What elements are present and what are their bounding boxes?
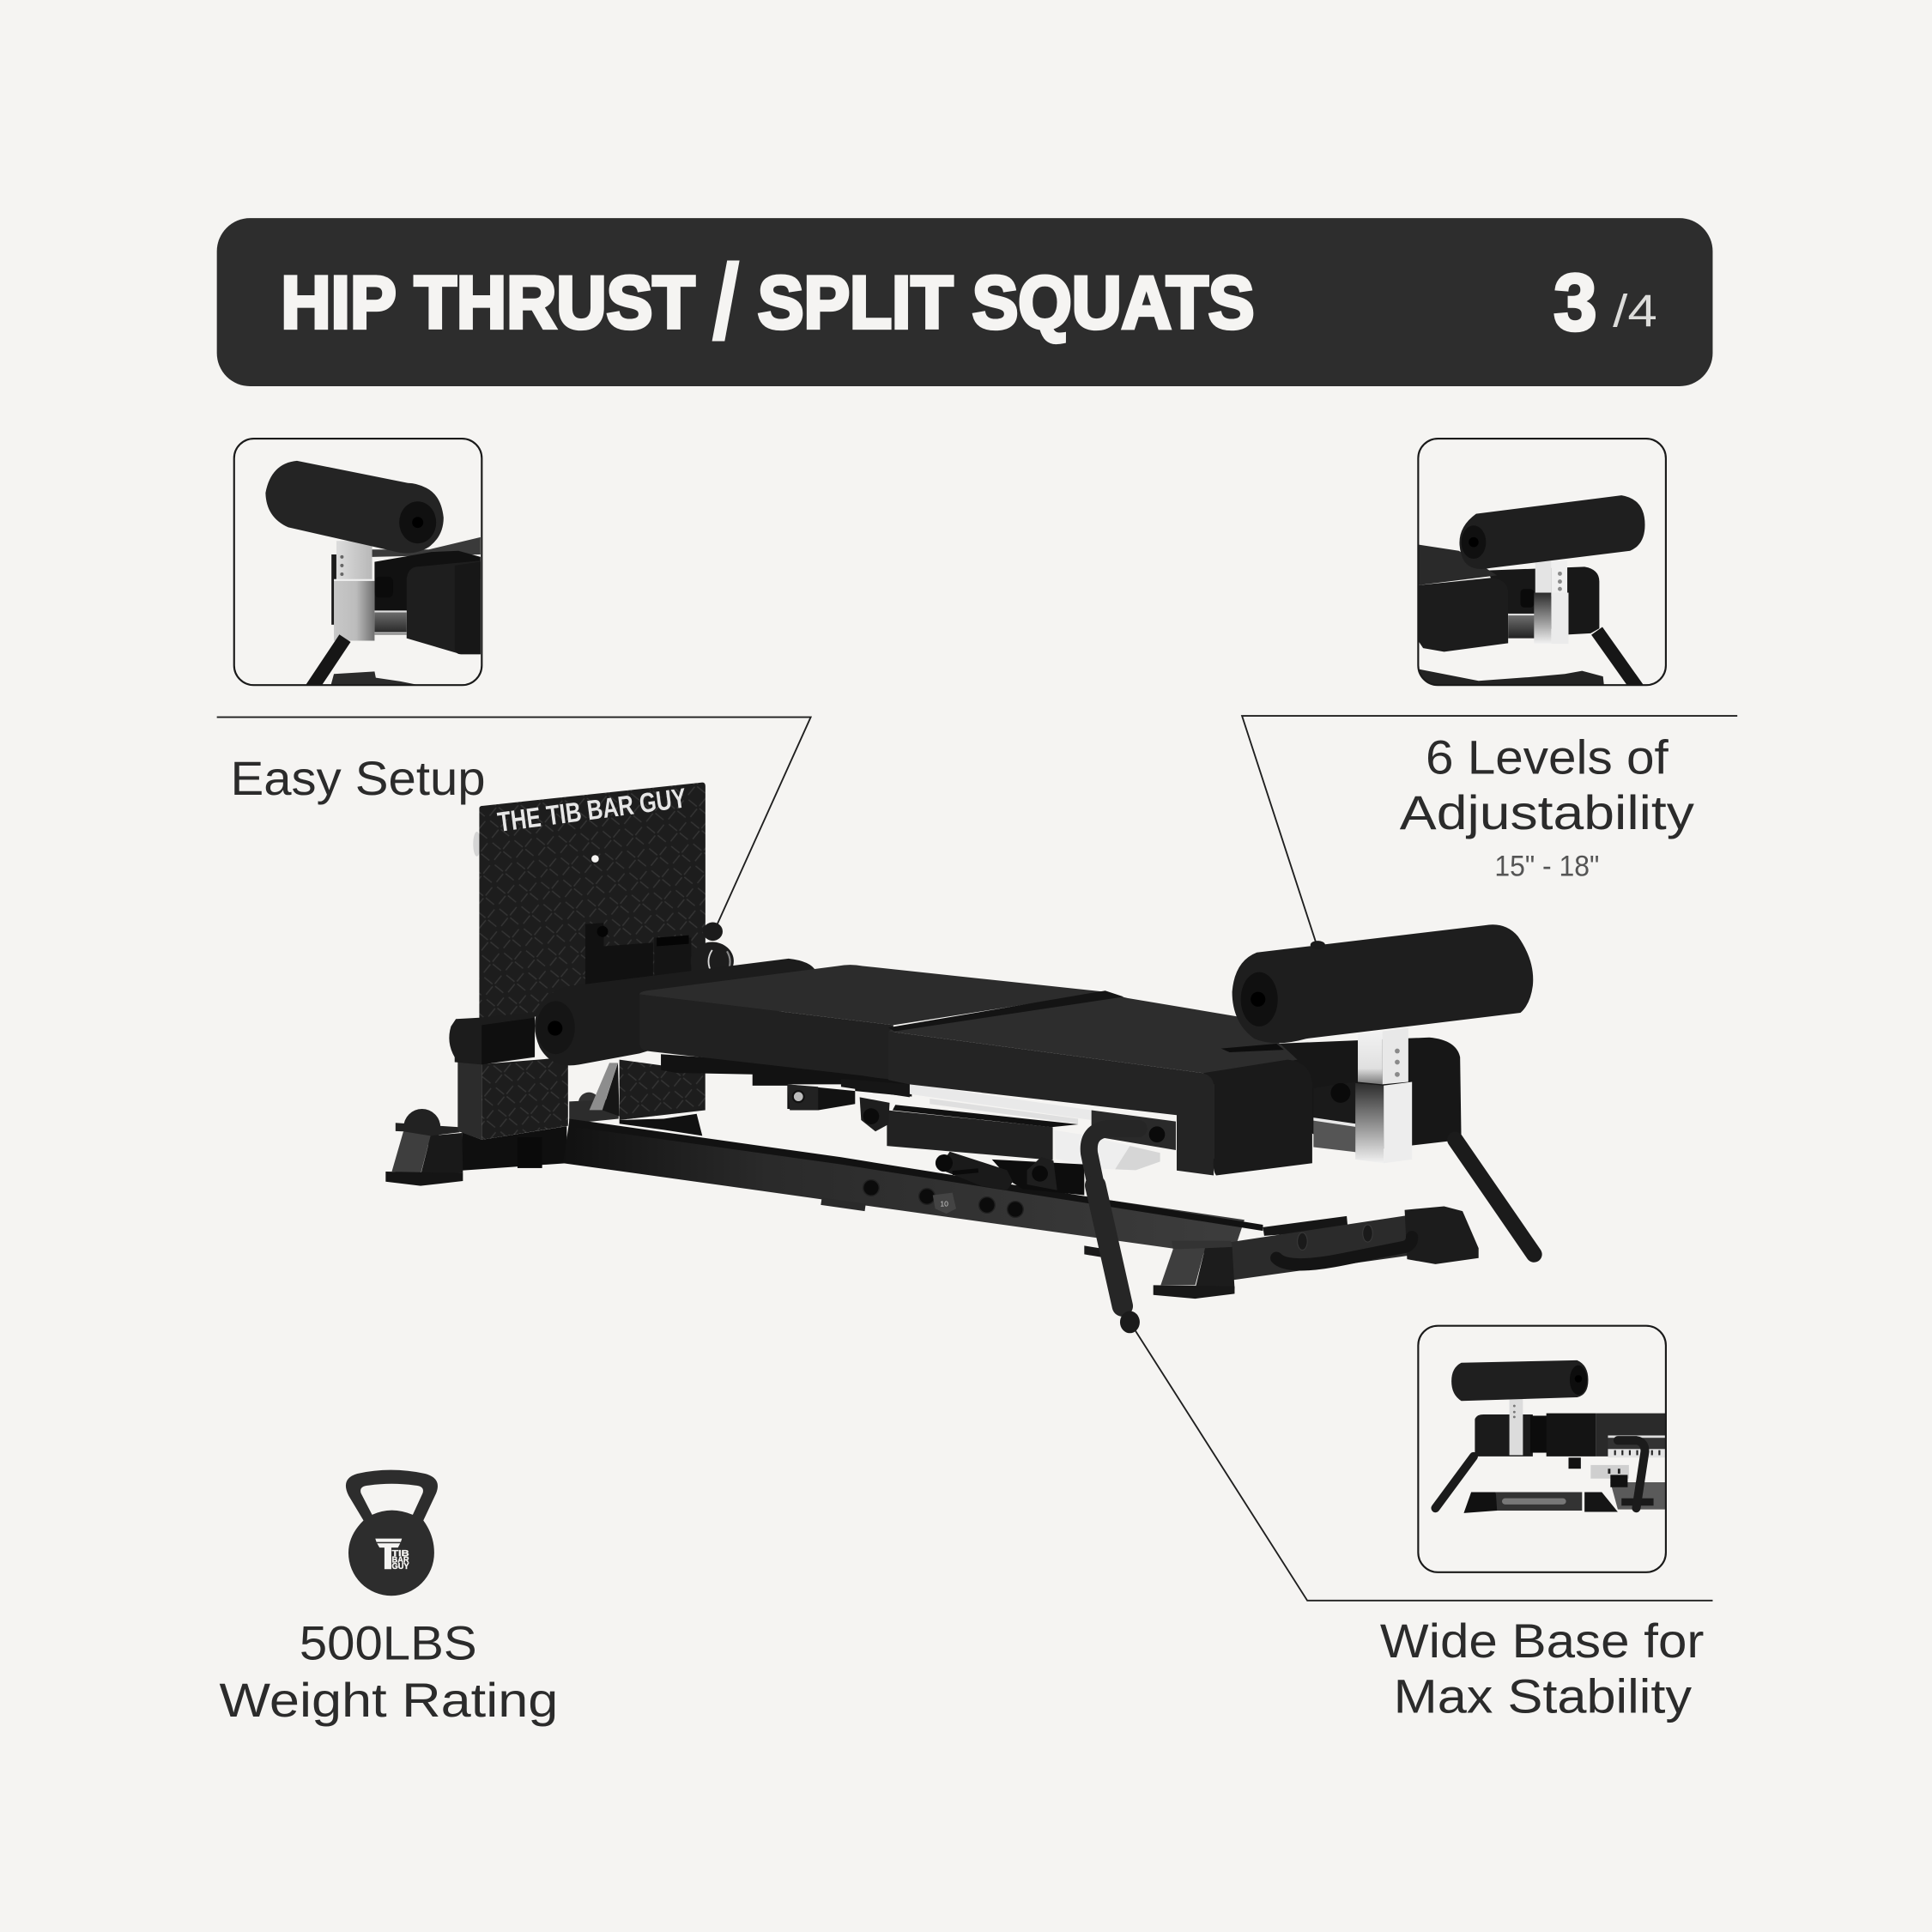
title banner (217, 218, 1712, 386)
under-pad mechanism (661, 1054, 1176, 1196)
panel: right thumbnail frame (1418, 439, 1666, 685)
thumbnail: bench frame and pad (372, 537, 481, 654)
label: wide base (1380, 1614, 1704, 1723)
label: weight rating (220, 1616, 558, 1727)
label: levels of adjustability: 15" - 18" (1494, 851, 1599, 883)
thumbnail: base frame (1463, 1475, 1666, 1513)
label: weight rating: Weight Rating (220, 1673, 558, 1727)
thumbnail: roller (1459, 495, 1645, 569)
left tube (449, 1013, 535, 1064)
panel: base thumbnail frame (1418, 1326, 1666, 1572)
right seat pad (888, 990, 1312, 1176)
label: easy setup: Easy Setup (230, 751, 486, 805)
rail bolts (863, 1180, 1023, 1217)
callout lines (217, 716, 1737, 1601)
lower plates and strut (457, 1057, 706, 1140)
thumbnail: roller (265, 461, 444, 553)
panel: left thumbnail frame (234, 439, 481, 685)
right foot frame (1154, 1206, 1479, 1299)
thumbnail: leg and foot (306, 634, 415, 685)
front handle leg (1089, 1129, 1138, 1306)
back plate (473, 782, 706, 1023)
main rail (563, 1119, 1263, 1259)
heading: hip thrust / split squats: SPLIT SQUATS (758, 262, 1254, 344)
page counter: 3 of 4 (1553, 258, 1657, 348)
silver post (1313, 1027, 1412, 1163)
small roller (535, 959, 815, 1065)
illustration: hip thrust machine (385, 782, 1534, 1333)
plate lettering: THE TIB BAR GUY (496, 782, 688, 838)
panel: left roller close-up (265, 461, 481, 690)
seam between pads (888, 990, 1123, 1032)
label: wide base: Max Stability (1394, 1669, 1692, 1723)
thumbnail: leg and foot (1418, 631, 1638, 690)
cross base and left foot (385, 1093, 619, 1186)
label: levels of adjustability (1400, 730, 1694, 883)
page counter: 3 of 4: /4 (1613, 286, 1657, 336)
kettlebell logo: GUY (392, 1562, 409, 1572)
icon: kettlebell (346, 1470, 438, 1596)
right rear leg (1455, 1140, 1534, 1254)
panel: wide base close-up (1435, 1360, 1666, 1513)
heading: hip thrust / split squats: HIP THRUST (281, 262, 695, 344)
rail bolts: 10 (940, 1199, 948, 1208)
thumbnail: silver post (331, 541, 374, 641)
label: levels of adjustability: Adjustability (1400, 785, 1694, 839)
big roller (1232, 924, 1533, 1043)
thumbnail: pad row (1475, 1397, 1666, 1479)
callout dots (703, 923, 1325, 1333)
label: weight rating: 500LBS (300, 1616, 477, 1670)
heading: hip thrust / split squats (281, 241, 1254, 362)
page counter: 3 of 4: 3 (1553, 258, 1597, 348)
heading: hip thrust / split squats: / (711, 241, 741, 362)
panel: right roller close-up (1418, 495, 1645, 690)
kettlebell logo: TIB (392, 1549, 409, 1559)
bracket and knob (585, 923, 734, 988)
label: levels of adjustability: 6 Levels of (1426, 730, 1669, 784)
far support block (1276, 1038, 1462, 1152)
thumbnail: legs (1435, 1440, 1645, 1508)
left seat pad (639, 965, 1105, 1080)
thumbnail: roller (1451, 1360, 1588, 1401)
kettlebell logo: BAR (392, 1556, 409, 1566)
thumbnail: pads (1418, 545, 1599, 651)
thumbnail: silver post (1534, 560, 1569, 644)
kettlebell logo (375, 1539, 409, 1572)
label: wide base: Wide Base for (1380, 1614, 1704, 1668)
